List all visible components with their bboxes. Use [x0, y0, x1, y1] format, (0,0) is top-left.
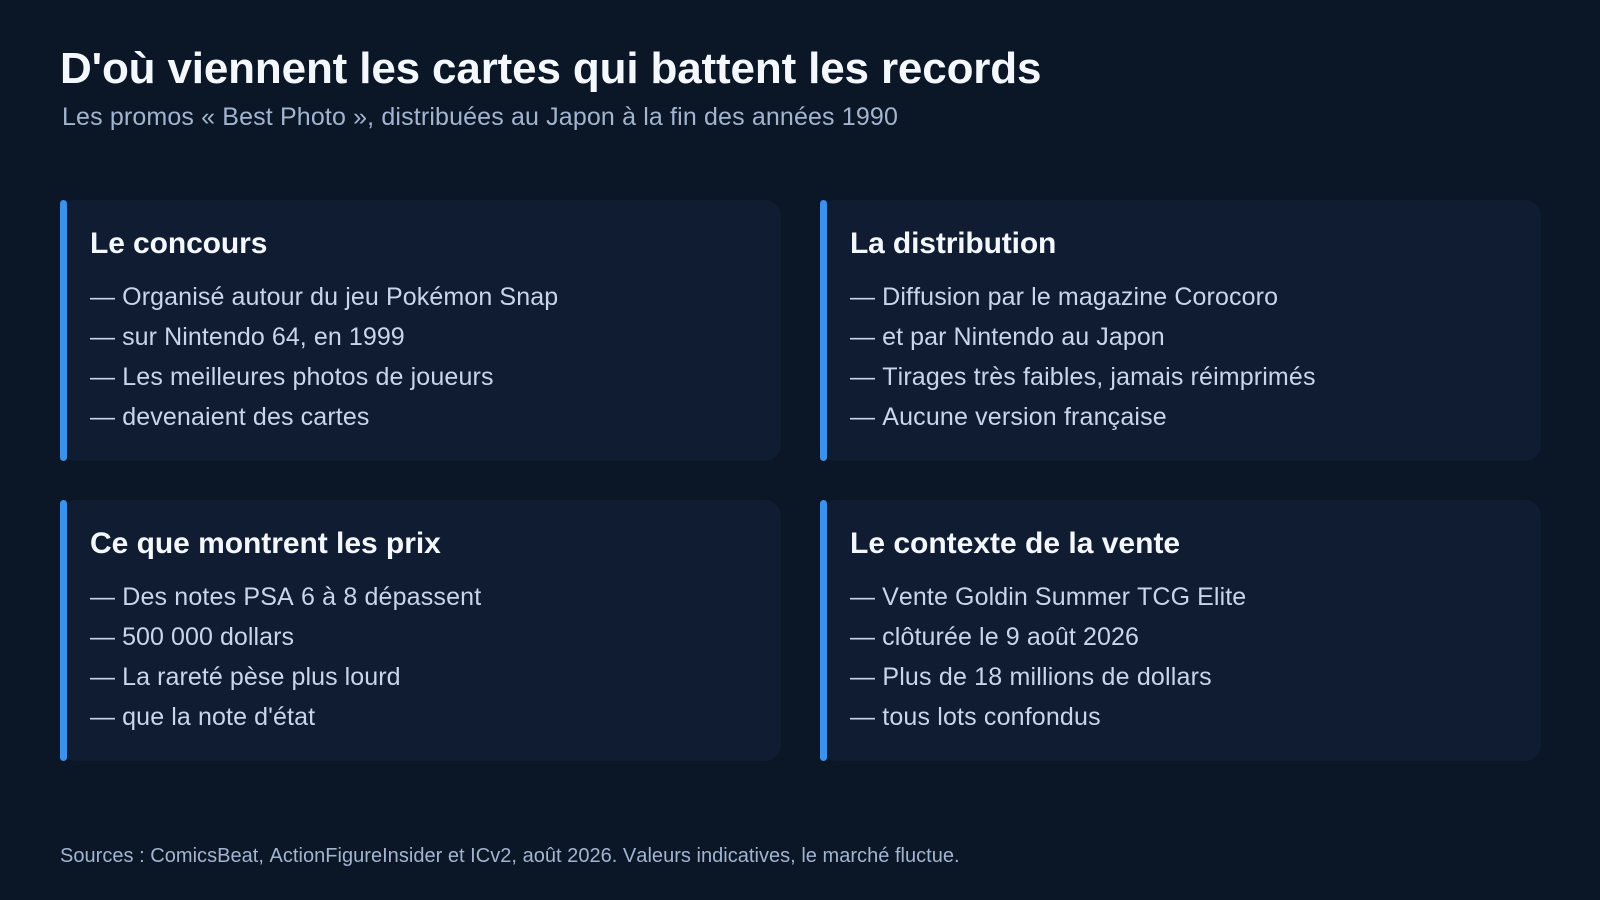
heading: le concours: Le concours — [90, 227, 267, 260]
panel: ce que montrent les prix — [60, 500, 781, 761]
panel: le concours — [60, 200, 781, 461]
text block: concours line 2: — sur Nintendo 64, en 1999 — [90, 323, 405, 351]
title: D'où viennent les cartes qui battent les records — [60, 44, 1041, 93]
heading: le contexte de la vente: Le contexte de la vente — [850, 527, 1180, 560]
accent bar — [820, 200, 827, 461]
text block: prix line 2: — 500 000 dollars — [90, 623, 294, 651]
text block: contexte line 2: — clôturée le 9 août 2026 — [850, 623, 1139, 651]
text block: prix line 3: — La rareté pèse plus lourd — [90, 663, 401, 691]
panel: la distribution — [820, 200, 1541, 461]
text block: distribution line 4: — Aucune version française — [850, 403, 1167, 431]
text block: distribution line 3: — Tirages très faibles, jamais réimprimés — [850, 363, 1316, 391]
accent bar — [820, 500, 827, 761]
text block: distribution line 2: — et par Nintendo au Japon — [850, 323, 1165, 351]
accent bar — [60, 200, 67, 461]
heading: la distribution: La distribution — [850, 227, 1056, 260]
text block: concours line 4: — devenaient des cartes — [90, 403, 370, 431]
text block: concours line 1: — Organisé autour du jeu Pokémon Snap — [90, 283, 558, 311]
text block: prix line 1: — Des notes PSA 6 à 8 dépassent — [90, 583, 481, 611]
subtitle: Les promos « Best Photo », distribuées au Japon à la fin des années 1990 — [62, 103, 898, 131]
text block: distribution line 1: — Diffusion par le magazine Corocoro — [850, 283, 1278, 311]
source note: Sources : ComicsBeat, ActionFigureInsider et ICv2, août 2026. Valeurs indicatives, le marché fluctue. — [60, 845, 960, 867]
accent bar — [60, 500, 67, 761]
text block: concours line 3: — Les meilleures photos de joueurs — [90, 363, 494, 391]
heading: ce que montrent les prix: Ce que montrent les prix — [90, 527, 441, 560]
panel: le contexte de la vente — [820, 500, 1541, 761]
text block: prix line 4: — que la note d'état — [90, 703, 315, 731]
text block: contexte line 4: — tous lots confondus — [850, 703, 1101, 731]
text block: contexte line 1: — Vente Goldin Summer TCG Elite — [850, 583, 1246, 611]
text block: contexte line 3: — Plus de 18 millions de dollars — [850, 663, 1212, 691]
